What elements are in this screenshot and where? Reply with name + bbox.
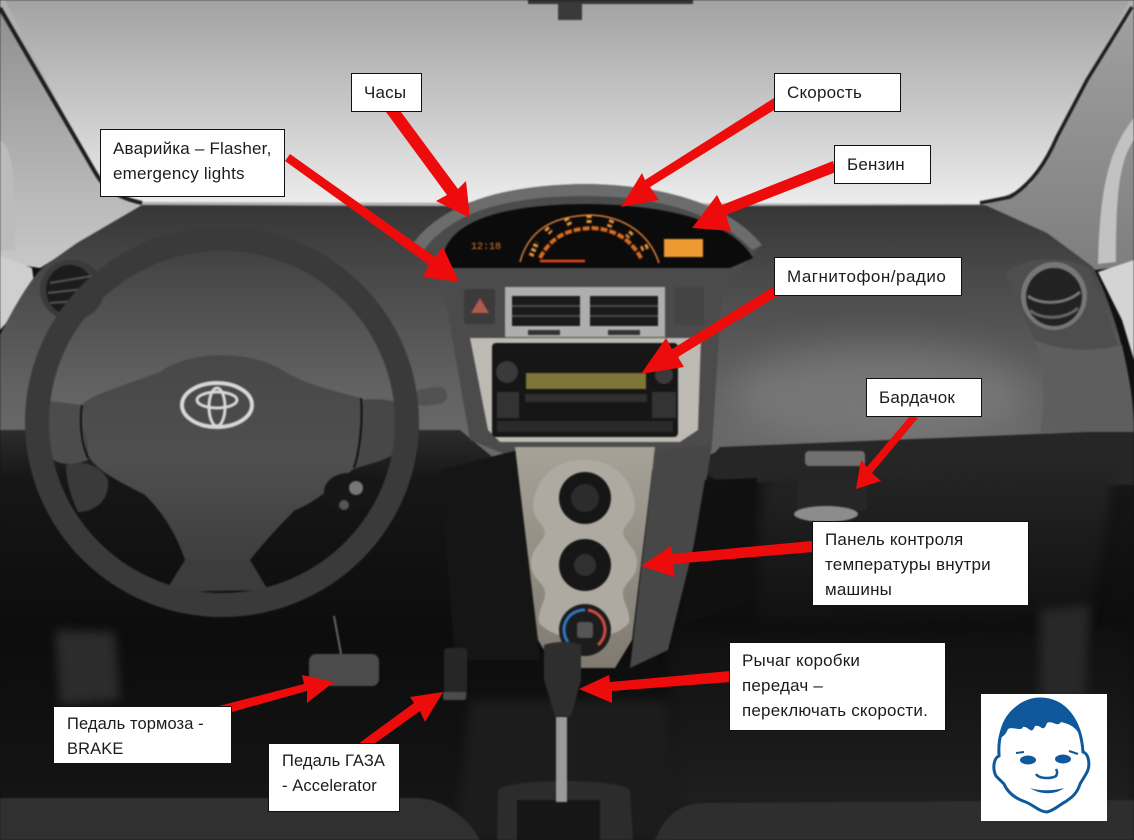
label: clock <box>351 73 422 112</box>
arrow: accelerator <box>358 692 443 744</box>
gas pedal <box>443 648 467 700</box>
arrow: clock <box>386 108 470 218</box>
left door trim <box>55 630 120 705</box>
steering wheel <box>37 239 407 605</box>
temperature dial <box>559 604 611 656</box>
label: accelerator pedal: - Accelerator <box>282 777 377 795</box>
label: climate control panel <box>812 521 1029 606</box>
hazard button <box>464 289 495 324</box>
label: brake pedal: BRAKE <box>67 740 123 758</box>
label: brake pedal: Педаль тормоза - <box>67 715 204 733</box>
center air vents <box>505 287 665 337</box>
label: accelerator pedal: Педаль ГАЗА <box>282 752 385 770</box>
label: fuel: Бензин <box>847 155 905 174</box>
arrow: brake <box>219 675 334 712</box>
label: gear selector: Рычаг коробки <box>742 651 860 670</box>
right switch <box>674 287 704 325</box>
label: accelerator pedal <box>268 743 400 812</box>
center tunnel <box>455 700 680 840</box>
arrow: speed <box>621 98 779 207</box>
mode dial <box>559 539 611 591</box>
face outline <box>994 699 1089 812</box>
floor right <box>670 625 1134 810</box>
label: hazard flasher: Аварийка – Flasher, <box>113 139 272 158</box>
label: glovebox <box>866 378 982 417</box>
arrow: gear selector <box>579 671 731 703</box>
label: hazard flasher: emergency lights <box>113 164 245 183</box>
rear-view mirror mount <box>528 0 693 20</box>
label: speed <box>774 73 901 112</box>
arrow: climate <box>641 541 813 577</box>
label: climate control panel: машины <box>825 580 892 599</box>
label: radio: Магнитофон/радио <box>787 267 946 286</box>
label: clock: Часы <box>364 83 406 102</box>
left pillar <box>0 8 142 330</box>
arrow: glovebox <box>856 416 918 489</box>
label: radio <box>774 257 962 296</box>
label: hazard flasher <box>100 129 285 197</box>
label: gear selector: передач – <box>742 676 823 695</box>
glovebox lid highlight <box>730 345 1030 445</box>
instrument cluster <box>442 204 753 268</box>
center console fascia <box>412 184 762 460</box>
brake pedal <box>309 616 379 686</box>
fuel display <box>664 239 703 257</box>
hair <box>999 699 1083 742</box>
label: fuel <box>834 145 931 184</box>
fan dial <box>559 472 611 524</box>
glovebox <box>755 451 1115 625</box>
arrow: fuel <box>692 161 836 231</box>
label: glovebox: Бардачок <box>879 388 955 407</box>
label: brake pedal <box>53 706 232 764</box>
label: climate control panel: Панель контроля <box>825 530 963 549</box>
dashboard upper <box>0 205 1134 470</box>
right air vent <box>1005 259 1118 350</box>
label: speed: Скорость <box>787 83 862 102</box>
red arrows <box>219 98 918 744</box>
toyota logo <box>182 383 252 427</box>
speedometer <box>520 215 659 263</box>
left air vent <box>40 260 104 320</box>
right console side <box>630 445 712 668</box>
logo: baby face <box>981 694 1107 821</box>
label: climate control panel: температуры внутри <box>825 555 991 574</box>
door sill right <box>1040 605 1090 700</box>
dashboard lower <box>0 430 1134 840</box>
windshield <box>0 0 1134 215</box>
radio bezel <box>470 338 701 442</box>
passenger trim <box>1035 340 1134 432</box>
right pillar <box>980 7 1134 360</box>
left console side <box>440 450 540 660</box>
clock: 12:18 <box>471 242 501 253</box>
ignition <box>324 473 372 511</box>
label: gear selector <box>729 642 946 731</box>
climate panel <box>515 447 655 668</box>
steering column stalk <box>414 386 448 407</box>
seats <box>0 798 1134 840</box>
label: gear selector: переключать скорости. <box>742 701 928 720</box>
gear shifter <box>544 642 581 802</box>
arrow: hazard <box>285 154 459 282</box>
radio unit <box>492 343 678 437</box>
arrow: radio <box>641 287 779 374</box>
